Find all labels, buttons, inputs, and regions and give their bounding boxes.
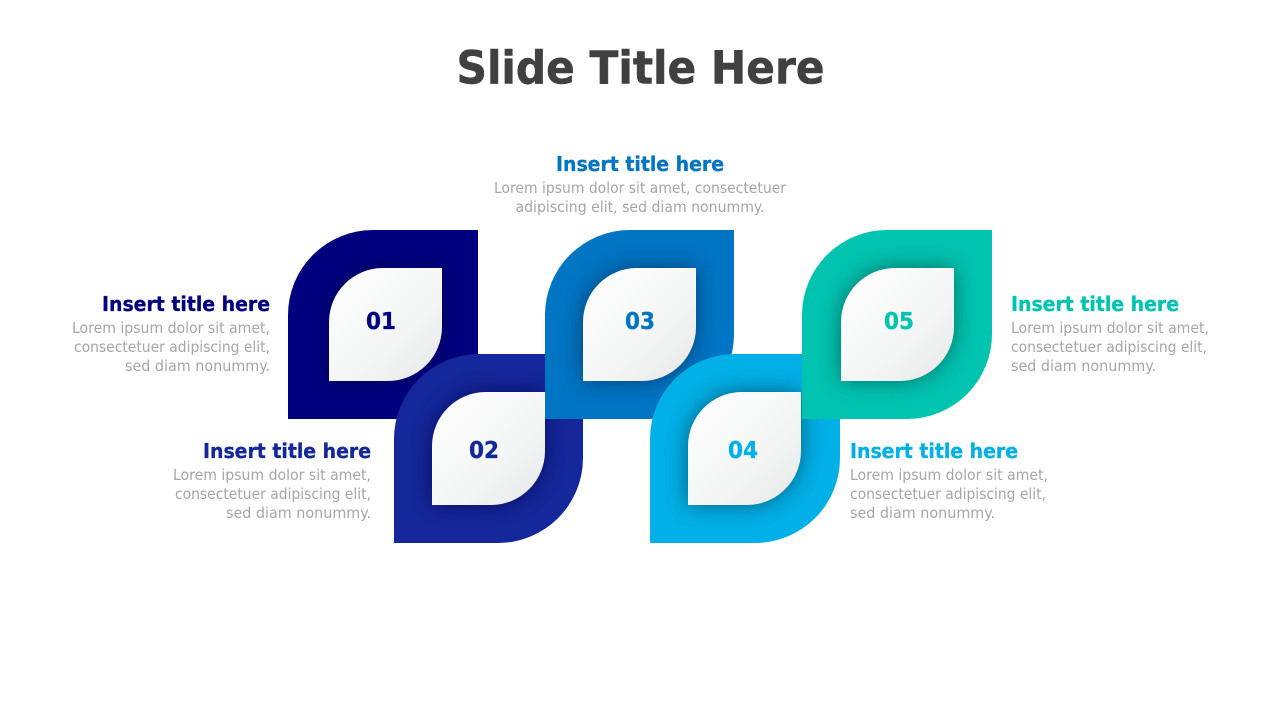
heading 04: Insert title here bbox=[850, 439, 1018, 463]
number 04: 04 bbox=[728, 436, 758, 464]
text block 03 bbox=[494, 152, 786, 216]
body 04: sed diam nonummy. bbox=[850, 504, 995, 522]
body 01: Lorem ipsum dolor sit amet, bbox=[72, 319, 270, 337]
heading 05: Insert title here bbox=[1011, 292, 1179, 316]
text block 01 bbox=[72, 292, 270, 375]
number 03: 03 bbox=[625, 307, 655, 335]
body 05: consectetuer adipiscing elit, bbox=[1011, 338, 1207, 356]
text block 05 bbox=[1011, 292, 1209, 375]
body 05: Lorem ipsum dolor sit amet, bbox=[1011, 319, 1209, 337]
heading 02: Insert title here bbox=[203, 439, 371, 463]
body 01: sed diam nonummy. bbox=[125, 357, 270, 375]
number 02: 02 bbox=[469, 436, 499, 464]
leaf 03 bbox=[545, 230, 734, 419]
body 02: Lorem ipsum dolor sit amet, bbox=[173, 466, 371, 484]
body 04: Lorem ipsum dolor sit amet, bbox=[850, 466, 1048, 484]
body 01: consectetuer adipiscing elit, bbox=[74, 338, 270, 356]
body 02: consectetuer adipiscing elit, bbox=[175, 485, 371, 503]
body 03 bbox=[494, 179, 786, 216]
body 04 bbox=[850, 466, 1048, 522]
number 01: 01 bbox=[366, 307, 396, 335]
number 05: 05 bbox=[884, 307, 914, 335]
body 02 bbox=[173, 466, 371, 522]
body 01 bbox=[72, 319, 270, 375]
body 04: consectetuer adipiscing elit, bbox=[850, 485, 1046, 503]
body 05 bbox=[1011, 319, 1209, 375]
leaf 01 bbox=[288, 230, 478, 419]
leaf 04 bbox=[650, 354, 840, 543]
body 03: adipiscing elit, sed diam nonummy. bbox=[516, 198, 764, 216]
heading 01: Insert title here bbox=[102, 292, 270, 316]
body 03: Lorem ipsum dolor sit amet, consectetuer bbox=[494, 179, 786, 197]
leaf 02 bbox=[394, 354, 583, 543]
heading 03: Insert title here bbox=[556, 152, 724, 176]
text block 02 bbox=[173, 439, 371, 522]
leaf 05 bbox=[802, 230, 992, 419]
body 02: sed diam nonummy. bbox=[226, 504, 371, 522]
body 05: sed diam nonummy. bbox=[1011, 357, 1156, 375]
text block 04 bbox=[850, 439, 1048, 522]
title: Slide Title Here bbox=[456, 42, 824, 94]
